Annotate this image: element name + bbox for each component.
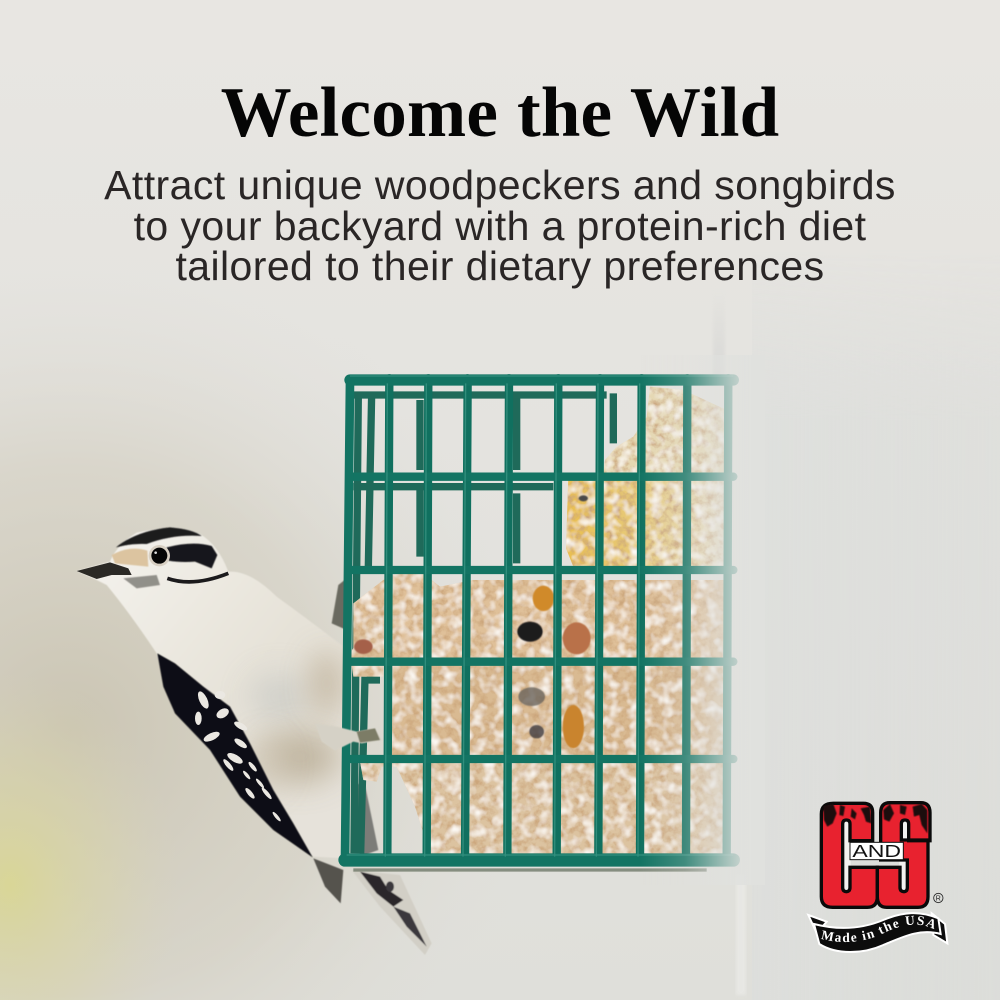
cage front vertical wires <box>387 378 728 862</box>
subtitle <box>104 162 896 289</box>
cheek shadow <box>123 575 160 588</box>
AND box: AND <box>852 841 901 861</box>
forehead <box>112 549 148 567</box>
black cap <box>116 527 202 547</box>
letter C <box>821 803 877 907</box>
Made in the USA banner <box>806 911 948 953</box>
feeder underside <box>353 865 707 875</box>
woodpecker body <box>77 527 432 955</box>
cage back wires <box>353 393 613 853</box>
long tail <box>352 870 432 955</box>
Made in the USA banner: Made in the USA <box>820 916 934 942</box>
striped tail behind feeder <box>353 783 378 857</box>
hidden tail behind feeder <box>332 578 347 630</box>
beak <box>77 562 132 579</box>
subtitle: Attract unique woodpeckers and songbirds <box>104 162 896 208</box>
title: Welcome the Wild <box>221 74 779 152</box>
body shading <box>250 650 343 790</box>
eye stripe <box>167 544 217 568</box>
letter slits <box>843 819 909 893</box>
body plumage <box>77 529 345 858</box>
suet cake <box>350 387 727 853</box>
wing spots <box>195 690 282 822</box>
neck line <box>167 573 228 582</box>
subtitle: to your backyard with a protein-rich diet <box>134 202 866 248</box>
registered mark: R <box>936 896 941 903</box>
woodpecker foot <box>315 723 382 751</box>
suet feeder <box>345 376 733 870</box>
letter S <box>877 803 930 907</box>
background <box>0 399 416 1000</box>
flame texture <box>823 804 927 833</box>
tail feathers <box>313 858 343 903</box>
suet fruit pieces <box>354 495 591 748</box>
eye <box>149 545 170 566</box>
wire highlights <box>347 376 733 857</box>
photo background with bird, feeder and logo <box>0 374 948 1000</box>
wing <box>157 653 313 857</box>
C and S logo <box>806 801 948 953</box>
cage front horizontal wires <box>345 380 733 860</box>
subtitle: tailored to their dietary preferences <box>175 243 825 289</box>
right side fade over feeder <box>640 355 765 885</box>
registered mark <box>934 893 943 903</box>
